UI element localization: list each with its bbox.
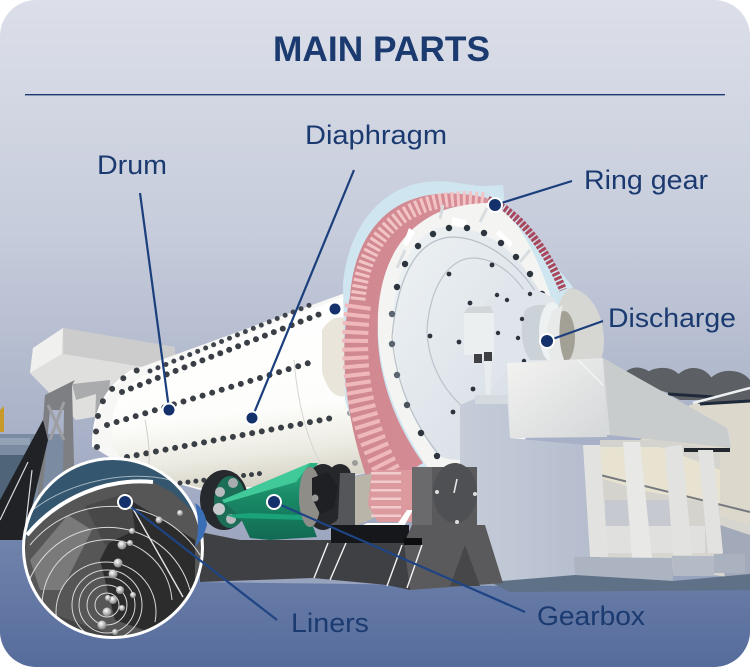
drum end between coupling and pinion: [355, 474, 376, 525]
floor: [0, 540, 750, 667]
pinion: [330, 470, 413, 543]
label: Ring gear: Ring gear: [584, 165, 708, 195]
support legs: [583, 442, 723, 558]
flange holes: [389, 225, 545, 459]
label: Discharge: Discharge: [608, 303, 736, 333]
base frame: [200, 533, 410, 590]
ring gear pedestal: [460, 395, 590, 582]
distant building at left: [0, 406, 64, 508]
label: Discharge: [540, 303, 736, 348]
gear teeth: [358, 199, 487, 300]
mill drum body with bolts: [93, 293, 388, 490]
area behind the support legs: [600, 440, 750, 580]
label: Drum: Drum: [97, 150, 167, 180]
gearbox: [222, 463, 318, 540]
title: MAIN PARTS: [273, 30, 490, 69]
label: Drum: [97, 150, 176, 416]
end flange: [378, 203, 556, 474]
label: Liners: [118, 495, 369, 638]
gear outer light-blue rim: [343, 181, 573, 480]
ring gear assembly: [343, 181, 573, 487]
discharge support box: [507, 358, 731, 448]
drive coupling: [200, 470, 248, 530]
support feet: [574, 554, 724, 581]
frame white stripes: [314, 543, 422, 588]
pink gear band: [344, 193, 495, 487]
label: Diaphragm: Diaphragm: [305, 120, 447, 150]
label: Gearbox: Gearbox: [537, 601, 646, 631]
blue cap behind magnifier: [195, 503, 207, 547]
label: Gearbox: [267, 495, 646, 631]
magnifier: inside of drum: [24, 458, 202, 640]
discharge hub and trunnion: [464, 288, 604, 404]
label: Ring gear: [488, 165, 708, 212]
dark red teeth on right: [488, 200, 563, 290]
floor band: [490, 574, 750, 592]
feed hopper and tower: [0, 328, 175, 540]
label: Diaphragm: [246, 120, 447, 424]
screw conveyor at right: [600, 368, 750, 580]
divider: [25, 94, 725, 95]
main bearing housing: [404, 463, 503, 590]
gearbox output disk: [299, 464, 351, 530]
label: Liners: Liners: [291, 608, 369, 638]
